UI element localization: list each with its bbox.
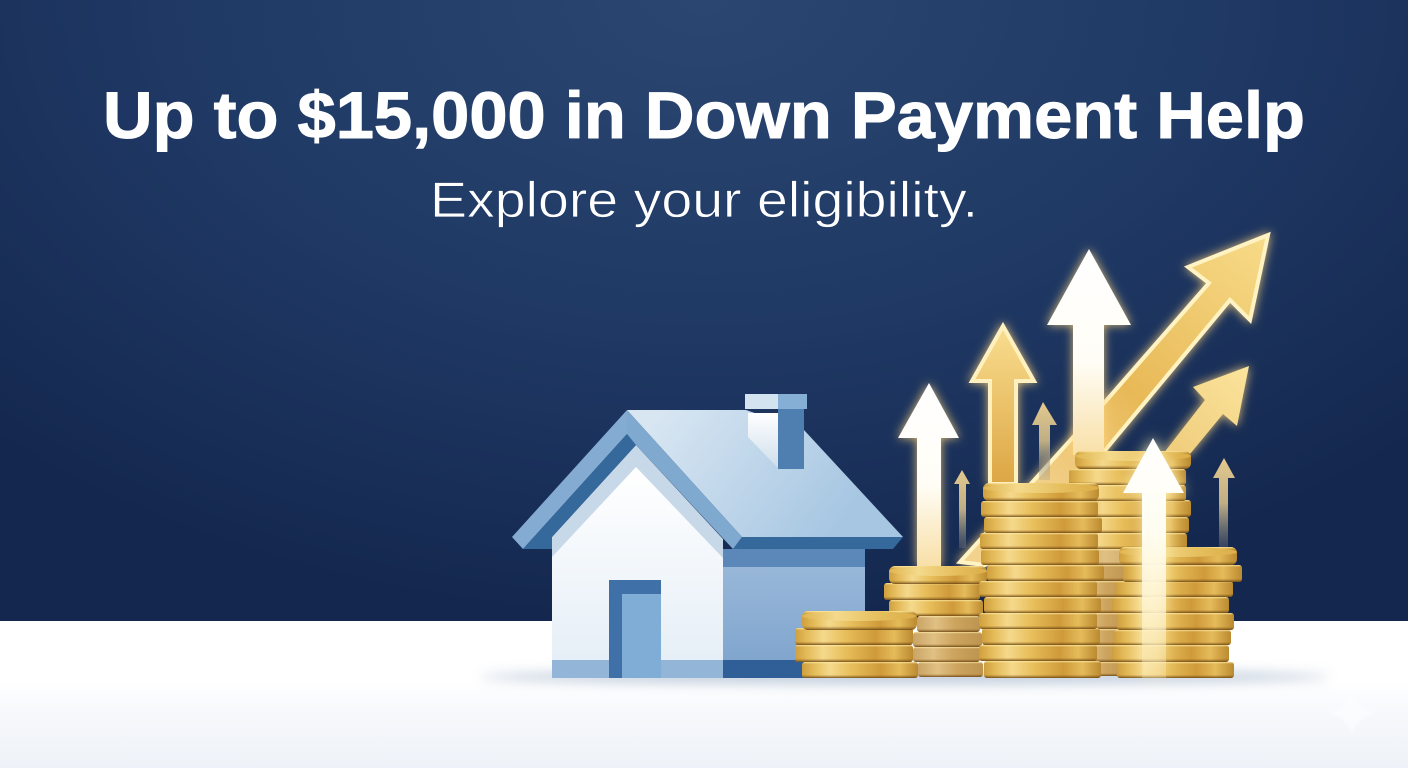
house front face — [552, 467, 723, 660]
ground: white floor — [0, 621, 1408, 768]
coin stack: back — [1069, 451, 1191, 676]
icon: small arrow right — [1213, 458, 1235, 548]
roof right band — [627, 410, 742, 549]
coin stack: front left — [795, 611, 918, 678]
icon: front glowing arrow — [1123, 438, 1184, 678]
icon: second diagonal arrow — [1163, 366, 1249, 454]
door — [609, 580, 723, 678]
ground shadow — [480, 670, 1330, 684]
icon: white arrow left — [898, 383, 959, 567]
chimney — [745, 394, 807, 469]
icon: small arrow center — [1032, 402, 1057, 480]
icon: gold arrow — [972, 326, 1034, 484]
coin stack: second — [884, 566, 987, 677]
icon: corner sparkle — [1329, 690, 1375, 736]
roof left band — [512, 410, 627, 549]
coin stack: right — [1112, 547, 1242, 678]
subtitle: Explore your eligibility. — [430, 172, 978, 228]
house base strip — [552, 660, 723, 678]
icon: small arrow left — [954, 470, 970, 548]
coin stack: center tall — [979, 483, 1104, 678]
house roof plane — [627, 410, 903, 537]
icon: tall white arrow — [1047, 249, 1131, 455]
house roof eave — [733, 537, 903, 549]
house front wall — [552, 445, 723, 678]
icon: large diagonal arrow — [960, 235, 1268, 565]
roof inner dark band — [523, 434, 636, 549]
icon: house — [512, 394, 903, 678]
title: Up to $15,000 in Down Payment Help — [103, 78, 1305, 152]
house side wall — [723, 549, 865, 678]
